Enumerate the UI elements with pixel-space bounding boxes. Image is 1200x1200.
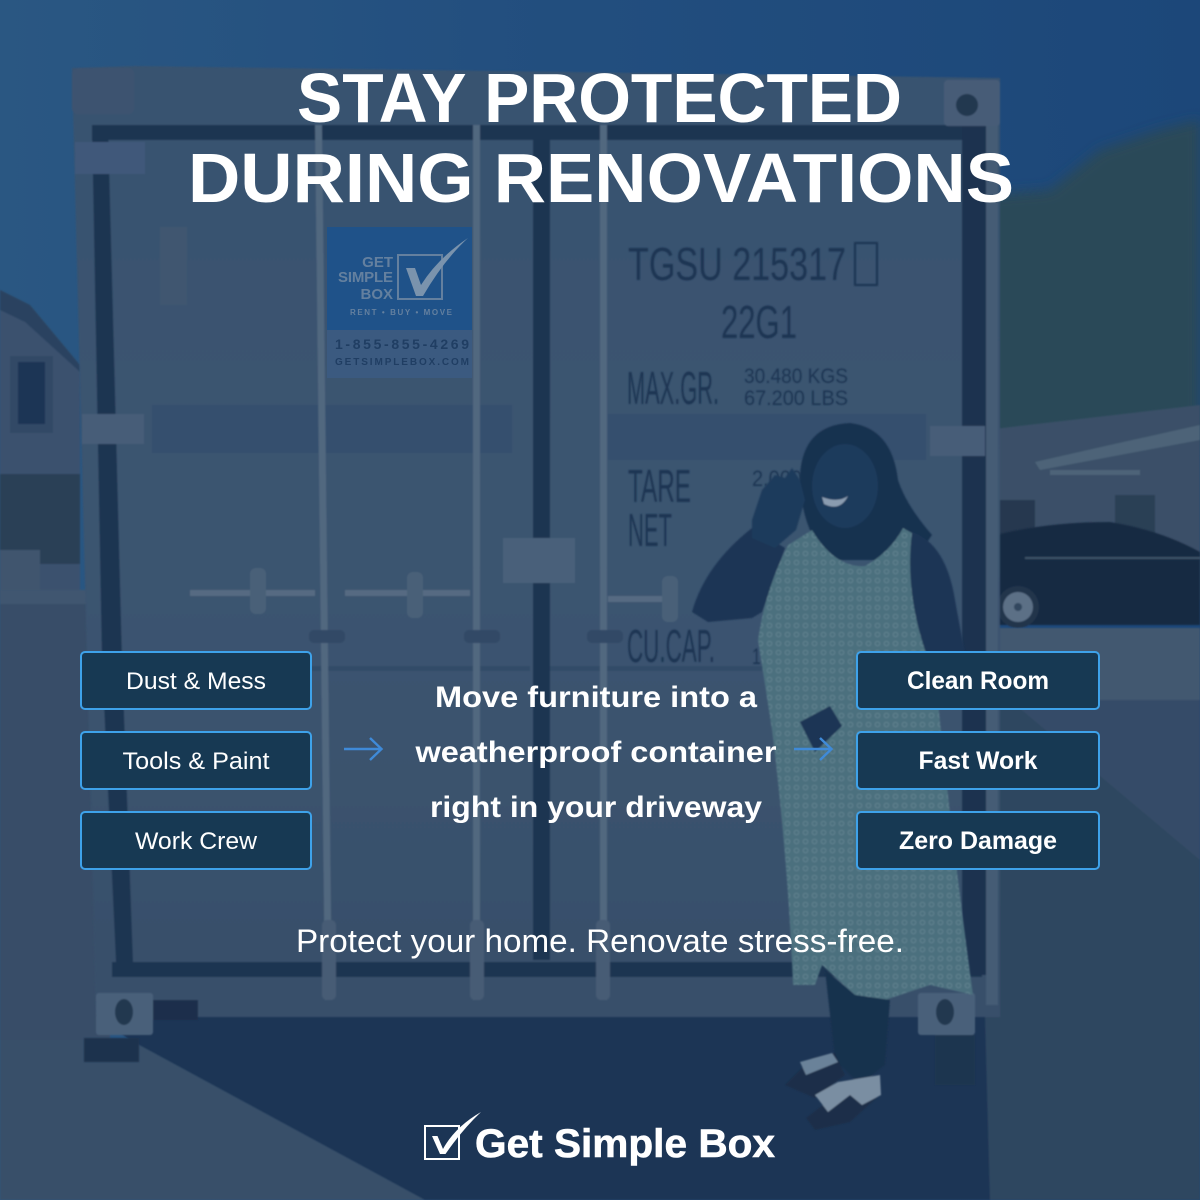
title: DURING RENOVATIONS [188,139,1014,217]
container markings: TARE [628,460,691,512]
tagline: Protect your home. Renovate stress-free. [296,923,904,959]
container markings: NET [628,504,672,556]
container markings: 2.000 [752,466,802,491]
container sticker [327,227,472,378]
woman arm [692,528,785,622]
solution text [414,681,777,824]
problem: dust and mess [81,652,311,709]
solution text: Move furniture into a [435,681,757,714]
title [188,59,1014,217]
solution text: right in your driveway [430,791,762,824]
car [985,522,1200,628]
woman hand [752,468,805,548]
benefit: clean room [857,652,1099,709]
woman waving [692,423,973,1130]
woman hand phone [800,706,842,752]
container markings: 22G1 [721,296,797,348]
arrow: solution to benefits [794,738,832,760]
container markings: CU.CAP. [627,620,715,672]
benefit: fast work: Fast Work [918,747,1038,775]
woman sandals [785,1053,881,1130]
woman dress [758,528,973,1000]
panel: problems [81,652,311,869]
container sticker: 1-855-855-4269 [335,336,469,352]
panel: benefits [857,652,1099,869]
solution text: weatherproof container [414,736,777,769]
problem: work crew: Work Crew [135,828,258,855]
ground [0,590,1200,1200]
container markings [627,238,877,672]
woman hair [800,423,932,560]
logo: Get Simple Box [425,1112,775,1166]
woman arm right [905,530,968,680]
woman face [812,444,878,528]
tree on the right [985,120,1200,450]
benefit: clean room: Clean Room [907,667,1049,695]
problem: tools and paint [81,732,311,789]
title: STAY PROTECTED [297,59,902,137]
arrow: problems to solution [344,738,382,760]
container sticker: GET [362,254,393,271]
container markings: 30.480 KGS [744,365,848,388]
problem: dust and mess: Dust & Mess [126,668,266,695]
container sticker: SIMPLE [338,269,393,286]
problem: tools and paint: Tools & Paint [122,748,270,775]
container body [72,66,1000,1085]
benefit: zero damage: Zero Damage [899,827,1057,855]
container sticker: RENT • BUY • MOVE [350,308,453,317]
container sticker: BOX [360,286,393,303]
container markings: TGSU 215317 [628,238,846,290]
benefit: fast work [857,732,1099,789]
benefit: zero damage [857,812,1099,869]
container markings: MAX.GR. [627,362,719,414]
container sticker: GETSIMPLEBOX.COM [335,357,469,368]
house on the left [0,290,80,600]
logo wordmark: Get Simple Box [475,1122,775,1166]
woman legs [825,970,890,1085]
house on the right [985,405,1200,600]
container markings: 67.200 LBS [744,387,848,410]
problem: work crew [81,812,311,869]
container markings: 1.1 [752,644,774,669]
icon: checkbox [425,1112,481,1159]
